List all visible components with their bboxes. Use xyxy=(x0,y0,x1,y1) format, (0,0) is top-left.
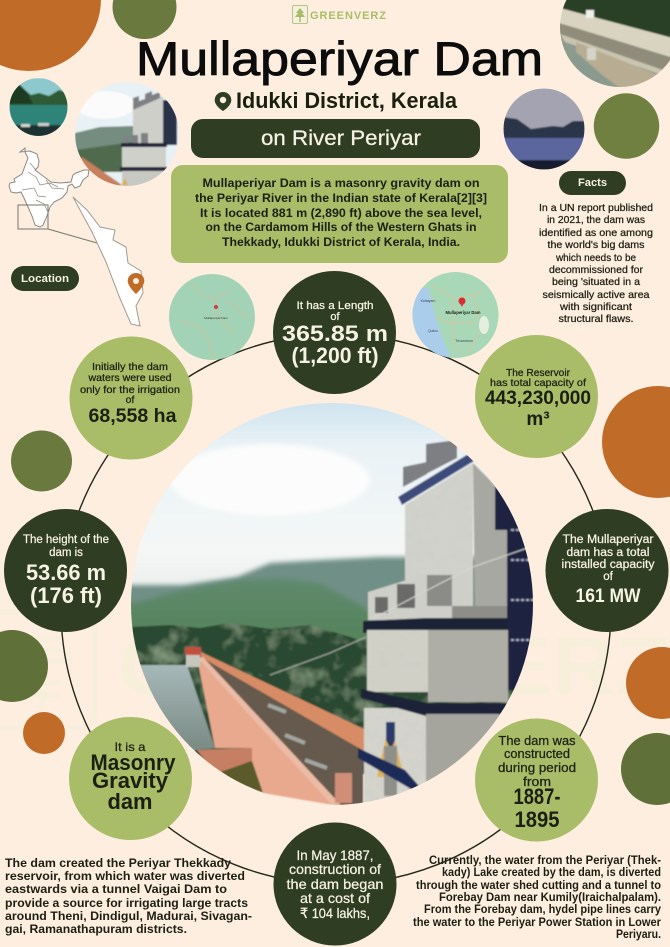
facts tag: Facts xyxy=(578,177,607,189)
stat: dam type: Gravity xyxy=(92,768,169,793)
facts text block: seismically active area xyxy=(542,289,650,301)
facts text block: In a UN report published xyxy=(539,202,653,214)
text block: reservoir and tunnel: eastwards via a tunnel Vaigai Dam to xyxy=(5,882,227,896)
stat: construction cost: In May 1887, xyxy=(296,847,374,863)
facts text block: with significant xyxy=(559,301,632,313)
map thumbnail: Mullaperiyar wide: Mullaperiyar Dam xyxy=(204,316,228,320)
stat: height: (176 ft) xyxy=(30,583,102,608)
stat: construction period xyxy=(475,718,598,842)
stat: height xyxy=(4,509,127,632)
facts text block: structural flaws. xyxy=(558,313,634,325)
map thumbnail: Mullaperiyar close: Trivandrum xyxy=(455,339,473,343)
text block: reservoir and tunnel: gai, Ramanathapuram districts. xyxy=(5,922,187,936)
map thumbnail: Mullaperiyar close: Quilon xyxy=(428,329,438,333)
stat: construction cost: at a cost of xyxy=(300,890,370,906)
stat: installed capacity: 161 MW xyxy=(576,586,641,607)
stat: construction period: 1895 xyxy=(514,807,560,832)
stat: irrigation: 68,558 ha xyxy=(88,406,177,427)
map: India outline xyxy=(9,148,97,243)
stat: length: of xyxy=(330,311,341,323)
watermark: faint logo and wordmark: GREENVERZ xyxy=(118,621,670,712)
decorative circle: orange small lower left xyxy=(23,712,65,754)
navy plaque xyxy=(494,486,533,690)
far parapet xyxy=(201,652,364,751)
facts text block: identified as one among xyxy=(539,227,653,239)
stat: irrigation xyxy=(70,336,192,460)
deck xyxy=(200,656,363,810)
cable xyxy=(270,637,366,675)
forest xyxy=(130,623,530,774)
stat: installed capacity xyxy=(546,509,668,632)
decorative circle: orange top left xyxy=(0,0,101,71)
main photo: dam and tower xyxy=(120,402,550,810)
stat: installed capacity: The Mullaperiyar xyxy=(562,534,654,546)
text block: reservoir and tunnel: around Theni, Dindigul, Madurai, Sivagan- xyxy=(5,909,252,923)
stat: installed capacity: dam has a total xyxy=(566,547,650,559)
stat: construction period: during period xyxy=(498,760,576,775)
text block: reservoir and tunnel: reservoir, from which water was diverted xyxy=(5,869,245,883)
intro text panel: Mullaperiyar Dam is a masonry gravity dam on xyxy=(202,178,480,190)
map thumbnail: Mullaperiyar close xyxy=(412,272,499,360)
stat: construction cost xyxy=(274,822,396,946)
text block: hydel power route: through the water shed cutting and a tunnel to xyxy=(416,880,661,892)
water xyxy=(140,664,216,752)
facts text block: being 'situated in a xyxy=(552,276,640,288)
stat: irrigation: of xyxy=(126,394,134,406)
arch xyxy=(377,720,404,777)
text block: hydel power route: Forebay Dam near Kumily(Iraichalpalam). xyxy=(439,892,661,904)
intro text panel xyxy=(171,165,508,263)
photo: reservoir lake xyxy=(503,88,585,170)
text block: reservoir and tunnel: The dam created the Periyar Thekkady xyxy=(5,856,231,870)
photo: top right dam wall xyxy=(556,0,670,89)
sky xyxy=(132,403,492,585)
facts tag xyxy=(559,171,626,195)
decorative circle: orange lower right xyxy=(626,647,670,719)
photo: small lake xyxy=(9,78,71,137)
decorative circle: olive left xyxy=(11,430,72,492)
connecting ring xyxy=(61,334,611,884)
banner: on River Periyar: on River Periyar xyxy=(261,127,421,150)
facts text block: in 2021, the dam was xyxy=(547,214,645,226)
stat: reservoir capacity: m³ xyxy=(526,409,550,430)
decorative circle: orange right xyxy=(602,386,670,498)
decorative circle: olive top right xyxy=(594,93,659,159)
location tag xyxy=(11,266,79,291)
stat: irrigation: Initially the dam xyxy=(92,361,168,373)
text block: reservoir and tunnel: provide a source for irrigating large tracts xyxy=(5,896,248,910)
intro text panel: on the Cardamom Hills of the Western Ghats in xyxy=(206,222,476,234)
stat: construction cost: construction of xyxy=(289,861,381,877)
stat: length xyxy=(273,271,396,394)
intake tower xyxy=(186,655,200,667)
map: Kerala with location pin xyxy=(73,197,144,326)
stat: height: The height of the xyxy=(23,534,109,546)
facts text block: decommissioned for xyxy=(549,264,643,276)
stat: dam type: Masonry xyxy=(90,750,176,775)
map thumbnail: Mullaperiyar close: Kottayam xyxy=(421,299,435,303)
text block: hydel power route: the water to the Periyar Power Station in Lower xyxy=(413,917,662,929)
stat: installed capacity: of xyxy=(603,571,614,583)
location tag: Location xyxy=(21,273,69,285)
facts text block: the world's big dams xyxy=(548,239,644,251)
decorative circle: olive top xyxy=(112,0,176,39)
stat: construction period: from xyxy=(523,774,551,789)
text block: hydel power route: Currently, the water from the Periyar (Thek- xyxy=(429,855,661,867)
stat: length: (1,200 ft) xyxy=(292,343,378,368)
upper tower xyxy=(473,463,507,620)
intro text panel: It is located 881 m (2,890 ft) above the sea level, xyxy=(200,208,482,220)
text block: reservoir and tunnel xyxy=(5,856,252,936)
stat: construction period: 1887- xyxy=(514,784,560,809)
merlons xyxy=(403,440,457,487)
stat: construction period: The dam was xyxy=(498,733,576,748)
subtitle with location pin: Idukki District, Kerala xyxy=(236,88,458,113)
text block: hydel power route: From the Forebay dam, hydel pipe lines carry xyxy=(424,904,662,916)
pier xyxy=(335,773,352,803)
text block: hydel power route: kady) Lake created by the dam, is diverted xyxy=(442,867,661,879)
stat: height: 53.66 m xyxy=(26,560,106,585)
stat: irrigation: waters were used xyxy=(87,372,172,384)
lower walls xyxy=(367,630,428,692)
map thumbnail: Mullaperiyar wide xyxy=(169,274,255,362)
decorative circle: olive lower left xyxy=(0,630,48,702)
stat: dam type: It is a xyxy=(114,740,146,754)
navy band upper xyxy=(363,618,507,633)
facts text block xyxy=(539,202,653,325)
stat: dam type: dam xyxy=(108,789,152,814)
title: Mullaperiyar Dam xyxy=(136,32,543,85)
map thumbnail: Mullaperiyar close: Mullaperiyar Dam xyxy=(446,310,481,315)
watermark: faint logo and wordmark xyxy=(0,612,670,728)
banner: on River Periyar xyxy=(191,119,480,158)
facts text block: which needs to be xyxy=(555,252,636,264)
logo xyxy=(292,6,386,24)
text block: hydel power route: Periyaru. xyxy=(616,929,661,941)
stat: length: 365.85 m xyxy=(282,321,388,346)
stat: reservoir capacity xyxy=(475,335,598,458)
hills xyxy=(131,554,476,614)
stat: height: dam is xyxy=(49,547,83,559)
stat: construction cost: ₹ 104 lakhs, xyxy=(300,905,370,921)
intro text panel: Thekkady, Idukki District of Kerala, India. xyxy=(222,237,460,249)
stat: construction period: constructed xyxy=(504,746,570,761)
stat: installed capacity: installed capacity xyxy=(562,559,655,571)
stat: construction cost: the dam began xyxy=(286,876,384,892)
stat: reservoir capacity: The Reservoir xyxy=(506,367,570,379)
lower tower battlements xyxy=(367,580,406,622)
decorative circle: olive lower right xyxy=(621,733,670,805)
photo: dam tower small xyxy=(75,82,179,190)
intro text panel: the Periyar River in the Indian state of Kerala[2][3] xyxy=(195,193,487,205)
stat: reservoir capacity: 443,230,000 xyxy=(485,388,591,409)
stat: irrigation: only for the irrigation xyxy=(80,384,180,396)
stat: dam type xyxy=(69,717,192,840)
text block: hydel power route xyxy=(413,855,662,941)
pink dam wall xyxy=(197,658,333,805)
logo: GREENVERZ xyxy=(310,10,386,22)
stat: reservoir capacity: has total capacity of xyxy=(490,377,586,389)
stat: length: It has a Length xyxy=(296,300,374,312)
